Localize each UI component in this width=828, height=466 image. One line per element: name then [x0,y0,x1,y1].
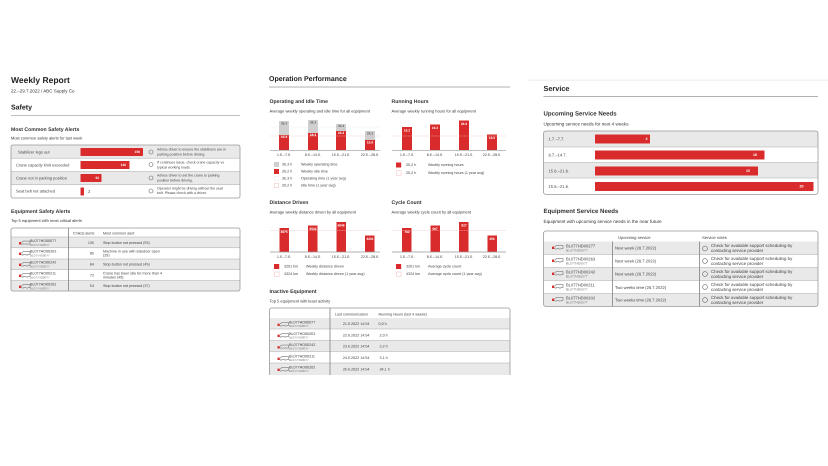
alert row: crane not in parking position: 52 [95,176,99,180]
chart panel: running hours: Running Hours [392,99,429,105]
row: BL077HD00263: BL077HD0077 [566,262,588,266]
bar row: 15.6.–21.6. second: 20 [800,184,804,188]
chart panel: running hours: 8.6.–14.6. [427,153,443,157]
bar row: 1.7.–7.7.: 4 [646,137,648,141]
chart panel: operating and idle time: 23.3 [338,131,344,135]
legend: operating and idle time: Operating time (1 year avg) [301,176,346,180]
row: BL077HD00242: 84 [90,262,94,266]
row: BL077HD00211: Check for available support scheduling by [711,282,793,287]
legend: running hours: 20,2 h [406,163,416,167]
row: BL077HD00202: Stop button not pressed (37) [103,284,150,288]
row: BL077HD00263: BL077HD00263 [30,250,56,254]
chart panel: operating and idle time: 8.6.–14.6. [305,153,321,157]
chart panel: running hours: 19.2 [432,126,438,130]
legend: cycle count: 4324 km [406,272,420,276]
legend: distance driven: Weekly distance driven (1 year avg) [306,272,365,276]
row: BL077HD00242: 3,2 h [380,344,388,348]
legend: operating and idle time: 20,2 h [282,170,292,174]
row: BL077HD00202: BL077HD00202 [566,296,596,300]
row: BL077HD00202: BL077HD0077 [289,369,309,373]
row: BL077HD00211: 72 [90,274,94,278]
row: BL077HD00242: Stop button not pressed (45) [103,262,150,266]
chart panel: operating and idle time [270,99,380,188]
row: BL077HD00077: 135 [88,241,94,245]
chart panel: cycle count: 456 [489,237,495,241]
row: BL077HD00277: BL077HD00277 [566,244,596,248]
row: BL077HD00077 [19,239,150,247]
alert row: crane not in parking position: position before driving. [157,178,193,182]
row: BL077HD00263: contacting service provider [711,261,764,266]
alert row: seat belt not attached: Operator might be driving without the seat [157,186,223,190]
legend: running hours [396,162,484,175]
row: BL077HD00202: BL077HD00202 [289,366,315,370]
row: BL077HD00263 [278,332,388,340]
alert row: crane capacity limit exceeded [16,160,224,170]
legend: distance driven: Weekly distance driven [306,264,344,268]
row: BL077HD00077: BL077HD00077 [30,239,56,243]
row: BL077HD00263: Machine in use with sidedoor open [103,250,160,254]
row: BL077HD00242 [278,343,388,350]
bar row: 8.7.–14.7. [548,150,764,160]
subtitle: equipment safety alerts: Top 5 equipment with most critical alerts [11,218,82,223]
row: BL077HD00242: Next week (28.7.2022) [615,272,657,276]
row: BL077HD00242: BL077HD0077 [289,346,309,350]
chart panel: operating and idle time: 22.6.–28.6. [361,153,379,157]
row: BL077HD00211: BL077HD0077 [289,358,309,362]
chart panel: cycle count: 15.6.–21.6. [455,255,473,259]
heading: service: Service [544,84,569,93]
legend: distance driven [274,264,365,276]
bar row: 15.6.–21.6. second: 15.6.–21.6. [548,184,569,189]
alert row: seat belt not attached: Seat belt not attached [16,188,55,194]
chart panel: operating and idle time: 18.3 [310,133,316,137]
panel: equipment safety alerts table: Most common alert [103,232,134,236]
chart panel: operating and idle time: 15.8 [367,140,373,144]
title: weekly report: Weekly Report [11,75,70,85]
alert row: crane capacity limit exceeded: If continues issue, check crane capacity vs [157,160,224,164]
row: BL077HD00263: 2,0 h [380,334,388,338]
bar row: 15.6.–21.6.: 15 [746,169,750,173]
chart panel: distance driven: 6848 [337,224,345,228]
panel: equipment service needs table: Service notes [702,235,727,240]
date and company: 22.–29.7.2022 / ABC Supply Co [11,88,75,94]
row: BL077HD00263: Check for available support scheduling by [711,256,793,261]
panel: inactive equipment table: Last communication [335,312,368,316]
alert row: stabilizer legs out: parking position before driving. [157,152,205,156]
chart panel: cycle count: 827 [461,224,467,228]
row: BL077HD00202: 34,1 h [380,368,390,372]
row: BL077HD00242: BL077HD00242 [289,343,315,347]
row: BL077HD00202 [278,366,390,373]
legend: distance driven: 4324 km [284,272,298,276]
alert row: stabilizer legs out: Advice driver to ensure the stabilizers are in [157,148,226,152]
row: BL077HD00211: minutes (49) [103,276,124,280]
row: BL077HD00211: BL077HD0077 [30,275,50,279]
alert row: crane capacity limit exceeded: typical working loads. [157,166,191,170]
bar row: 8.7.–14.7.: 16 [753,153,757,157]
chart panel: distance driven: 22.6.–28.6. [361,255,379,259]
row: BL077HD00077: BL077HD0077 [289,324,309,328]
row: BL077HD00211 [278,354,388,362]
row: BL077HD00242 [19,260,150,268]
row: BL077HD00242: BL077HD00242 [566,270,596,274]
chart panel: cycle count: 1.6.–7.6. [400,255,414,259]
chart panel: running hours [392,99,506,175]
panel: equipment service needs table: Upcoming service [618,235,651,240]
row: BL077HD00277: Check for available support scheduling by [711,243,793,248]
bar row: 1.7.–7.7.: 1.7.–7.7. [548,136,564,142]
chart panel: distance driven: Distance Driven [270,200,308,206]
row: BL077HD00077: BL077HD0077 [30,243,50,247]
row: BL077HD00211 [552,282,793,292]
panel: equipment service needs table [544,231,818,306]
row: BL077HD00202: contacting service provider [711,300,764,305]
heading: safety: Safety [11,104,32,112]
row: BL077HD00211: BL077HD00211 [30,272,56,276]
panel: inactive equipment table: Running Hours (last 4 weeks) [378,312,427,316]
row: BL077HD00077: Stop button not pressed (55) [103,241,150,245]
legend: cycle count: 3201 km [406,264,420,268]
panel: upcoming service needs bars [544,131,818,194]
row: BL077HD00263: (29) [103,254,110,258]
legend: operating and idle time: Weekly operating time [301,163,337,167]
row: BL077HD00202 [552,295,793,305]
chart panel: distance driven: 3201 [366,237,374,241]
row: BL077HD00211: BL077HD00211 [289,354,315,358]
chart panel: running hours: Average weekly running hours for all equipment [392,108,477,114]
row: BL077HD00263: BL077HD00263 [289,332,315,336]
legend: running hours: Weekly running hours (1 year avg) [428,171,484,175]
chart panel: running hours: 16.2 [404,128,410,132]
bar row: 15.6.–21.6.: 15.6.–21.6. [548,168,569,174]
subtitle: equipment service needs: Equipment with upcoming service needs in the near future [544,219,662,224]
row: BL077HD00242: BL077HD0077 [30,264,50,268]
chart panel: operating and idle time: 1.6.–7.6. [277,153,291,157]
row: BL077HD00263 [19,250,160,258]
alert row: stabilizer legs out: Stabilizer legs out [18,150,50,154]
legend: cycle count: Average cycle count (1 year avg) [428,272,482,276]
chart panel: distance driven: Average weekly distance driven by all equipment [270,210,357,214]
panel: equipment safety alerts table [11,228,240,291]
row: BL077HD00263: BL077HD00263 [566,256,596,262]
chart panel: distance driven: 8.6.–14.6. [305,255,321,259]
row: BL077HD00202: BL077HD0077 [30,286,50,290]
row: BL077HD00211 [19,272,162,280]
heading: upcoming service needs: Upcoming Service Needs [544,110,617,118]
row: BL077HD00242: BL077HD0077 [566,274,588,278]
chart panel: running hours: 26.9 [461,122,467,126]
row: BL077HD00202: Check for available support scheduling by [711,295,793,300]
legend: operating and idle time: 20,2 h [282,184,292,188]
heading: inactive equipment: Inactive Equipment [270,289,317,295]
row: BL077HD00263: BL077HD0077 [289,336,309,340]
legend: running hours: Weekly running hours [428,163,464,167]
alert row: stabilizer legs out [18,148,226,156]
row: BL077HD00077: 0,0 h [378,322,387,326]
row: BL077HD00277: contacting service provider [711,248,764,253]
alert row: seat belt not attached: belt. Please check with a driver. [157,191,207,195]
alert row: seat belt not attached: 3 [88,189,91,194]
heading: most common safety alerts: Most Common Safety Alerts [11,127,80,133]
chart panel: running hours: 22.6.–28.6. [483,153,501,157]
chart panel: operating and idle time: Operating and Idle Time [270,99,328,105]
row: BL077HD00277: Next week (28.7.2022) [615,246,657,250]
row: BL077HD00277: BL077HD0077 [566,248,588,252]
bar row: 1.7.–7.7. [548,134,650,144]
legend: operating and idle time [274,162,346,188]
row: BL077HD00263: Next week (28.7.2022) [615,258,657,264]
chart panel: operating and idle time: 15.3 [281,135,287,139]
chart panel: cycle count: Cycle Count [392,200,422,206]
bar row: 8.7.–14.7.: 8.7.–14.7. [548,152,567,158]
chart panel: distance driven [270,200,380,276]
row: BL077HD00077: BL077HD00077 [289,320,315,324]
row: BL077HD00211: Crane has been idle for more than 4 [103,272,162,276]
row: BL077HD00202: 25.6.2022 14:54 [343,368,370,372]
heading: equipment service needs: Equipment Service Needs [544,208,619,215]
row: BL077HD00242: contacting service provider [711,274,764,279]
alert row: crane not in parking position: Advice driver to set the crane to parking [157,174,220,178]
chart panel: operating and idle time: 38.3 [310,120,316,124]
chart panel: cycle count: Average weekly cycle count by all equipment [392,210,472,214]
row: BL077HD00211: 24.6.2022 14:54 [343,356,370,360]
alert row: crane capacity limit exceeded: Crane capacity limit exceeded [16,162,69,168]
row: BL077HD00202: 54 [90,284,94,288]
row: BL077HD00202 [19,282,150,290]
bar row: 15.6.–21.6. second [548,182,814,191]
row: BL077HD00211: contacting service provider [711,287,764,292]
row: BL077HD00277 [552,243,793,253]
legend: operating and idle time: 35,3 h [282,163,292,167]
chart panel: cycle count: 587 [432,227,438,231]
chart panel: cycle count: 8.6.–14.6. [427,255,443,259]
row: BL077HD00242: Check for available support scheduling by [711,269,793,274]
row: BL077HD00211: BL077HD00211 [566,282,596,288]
alert row: seat belt not attached [16,186,223,196]
panel: inactive equipment table [270,308,510,375]
legend: cycle count [396,264,482,276]
heading: equipment safety alerts: Equipment Safety Alerts [11,209,70,215]
chart panel: cycle count: 22.6.–28.6. [483,255,501,259]
subtitle: inactive equipment: Top 5 equipment with least activity [270,298,330,304]
row: BL077HD00263: 22.6.2022 14:54 [343,334,370,338]
chart panel: operating and idle time: 15.6.–21.6. [332,153,350,157]
chart panel: operating and idle time: Average weekly operating and idle time for all equipment [270,108,371,114]
chart panel: distance driven: 4875 [280,230,288,234]
chart panel: running hours: 1.6.–7.6. [400,153,414,157]
alert row: crane capacity limit exceeded: 126 [121,163,126,167]
row: BL077HD00211: Two weeks time (28.7.2022) [615,285,667,290]
chart panel: operating and idle time: 33.3 [338,124,344,128]
legend: cycle count: Average cycle count [428,264,461,268]
row: BL077HD00263: BL077HD0077 [30,253,50,257]
chart panel: distance driven: 5532 [309,227,317,231]
chart panel: operating and idle time: 28.2 [367,132,373,136]
chart panel: operating and idle time: 35.3 [281,122,287,126]
panel: equipment safety alerts table: Critical alerts [73,232,94,236]
chart panel: running hours: 15.6.–21.6. [455,153,473,157]
row: BL077HD00242: 23.6.2022 14:54 [343,344,370,348]
legend: operating and idle time: Idle time (1 year avg) [301,184,336,188]
legend: distance driven: 3201 km [284,264,298,268]
row: BL077HD00202: BL077HD00202 [30,282,56,286]
heading: operation performance: Operation Performance [269,75,347,83]
chart panel: distance driven: 1.6.–7.6. [277,255,291,259]
row: BL077HD00263 [552,256,793,266]
chart panel: cycle count: 782 [404,230,410,234]
legend: operating and idle time: Weekly idle time [301,170,328,174]
row: BL077HD00077: 21.6.2022 14:54 [343,322,370,326]
row: BL077HD00202: BL077HD0077 [566,300,588,304]
legend: running hours: 20,2 h [406,171,416,175]
chart panel: cycle count [392,200,506,276]
subtitle: upcoming service needs: Upcoming service needs for next 4 weeks [544,122,629,126]
row: BL077HD00263: 85 [90,252,94,256]
row: BL077HD00242 [552,269,793,279]
chart panel: distance driven: 15.6.–21.6. [332,255,350,259]
row: BL077HD00242: BL077HD00242 [30,260,56,264]
row: BL077HD00211: BL077HD0077 [566,288,588,292]
alert row: stabilizer legs out: 159 [135,150,140,154]
alert row: crane not in parking position [16,174,220,182]
alert row: crane not in parking position: Crane not in parking position [16,176,67,180]
row: BL077HD00202: Two weeks time (28.7.2022) [615,298,667,302]
row: BL077HD00077 [278,320,387,328]
row: BL077HD00211: 3,1 h [380,356,388,360]
bar row: 15.6.–21.6. [548,166,758,176]
panel: most common safety alerts table [11,145,240,198]
chart panel: running hours: 13.0 [489,136,495,140]
legend: operating and idle time: 35,3 h [282,176,292,180]
subtitle: safety alerts: Most common safety alerts for last week [11,136,82,140]
